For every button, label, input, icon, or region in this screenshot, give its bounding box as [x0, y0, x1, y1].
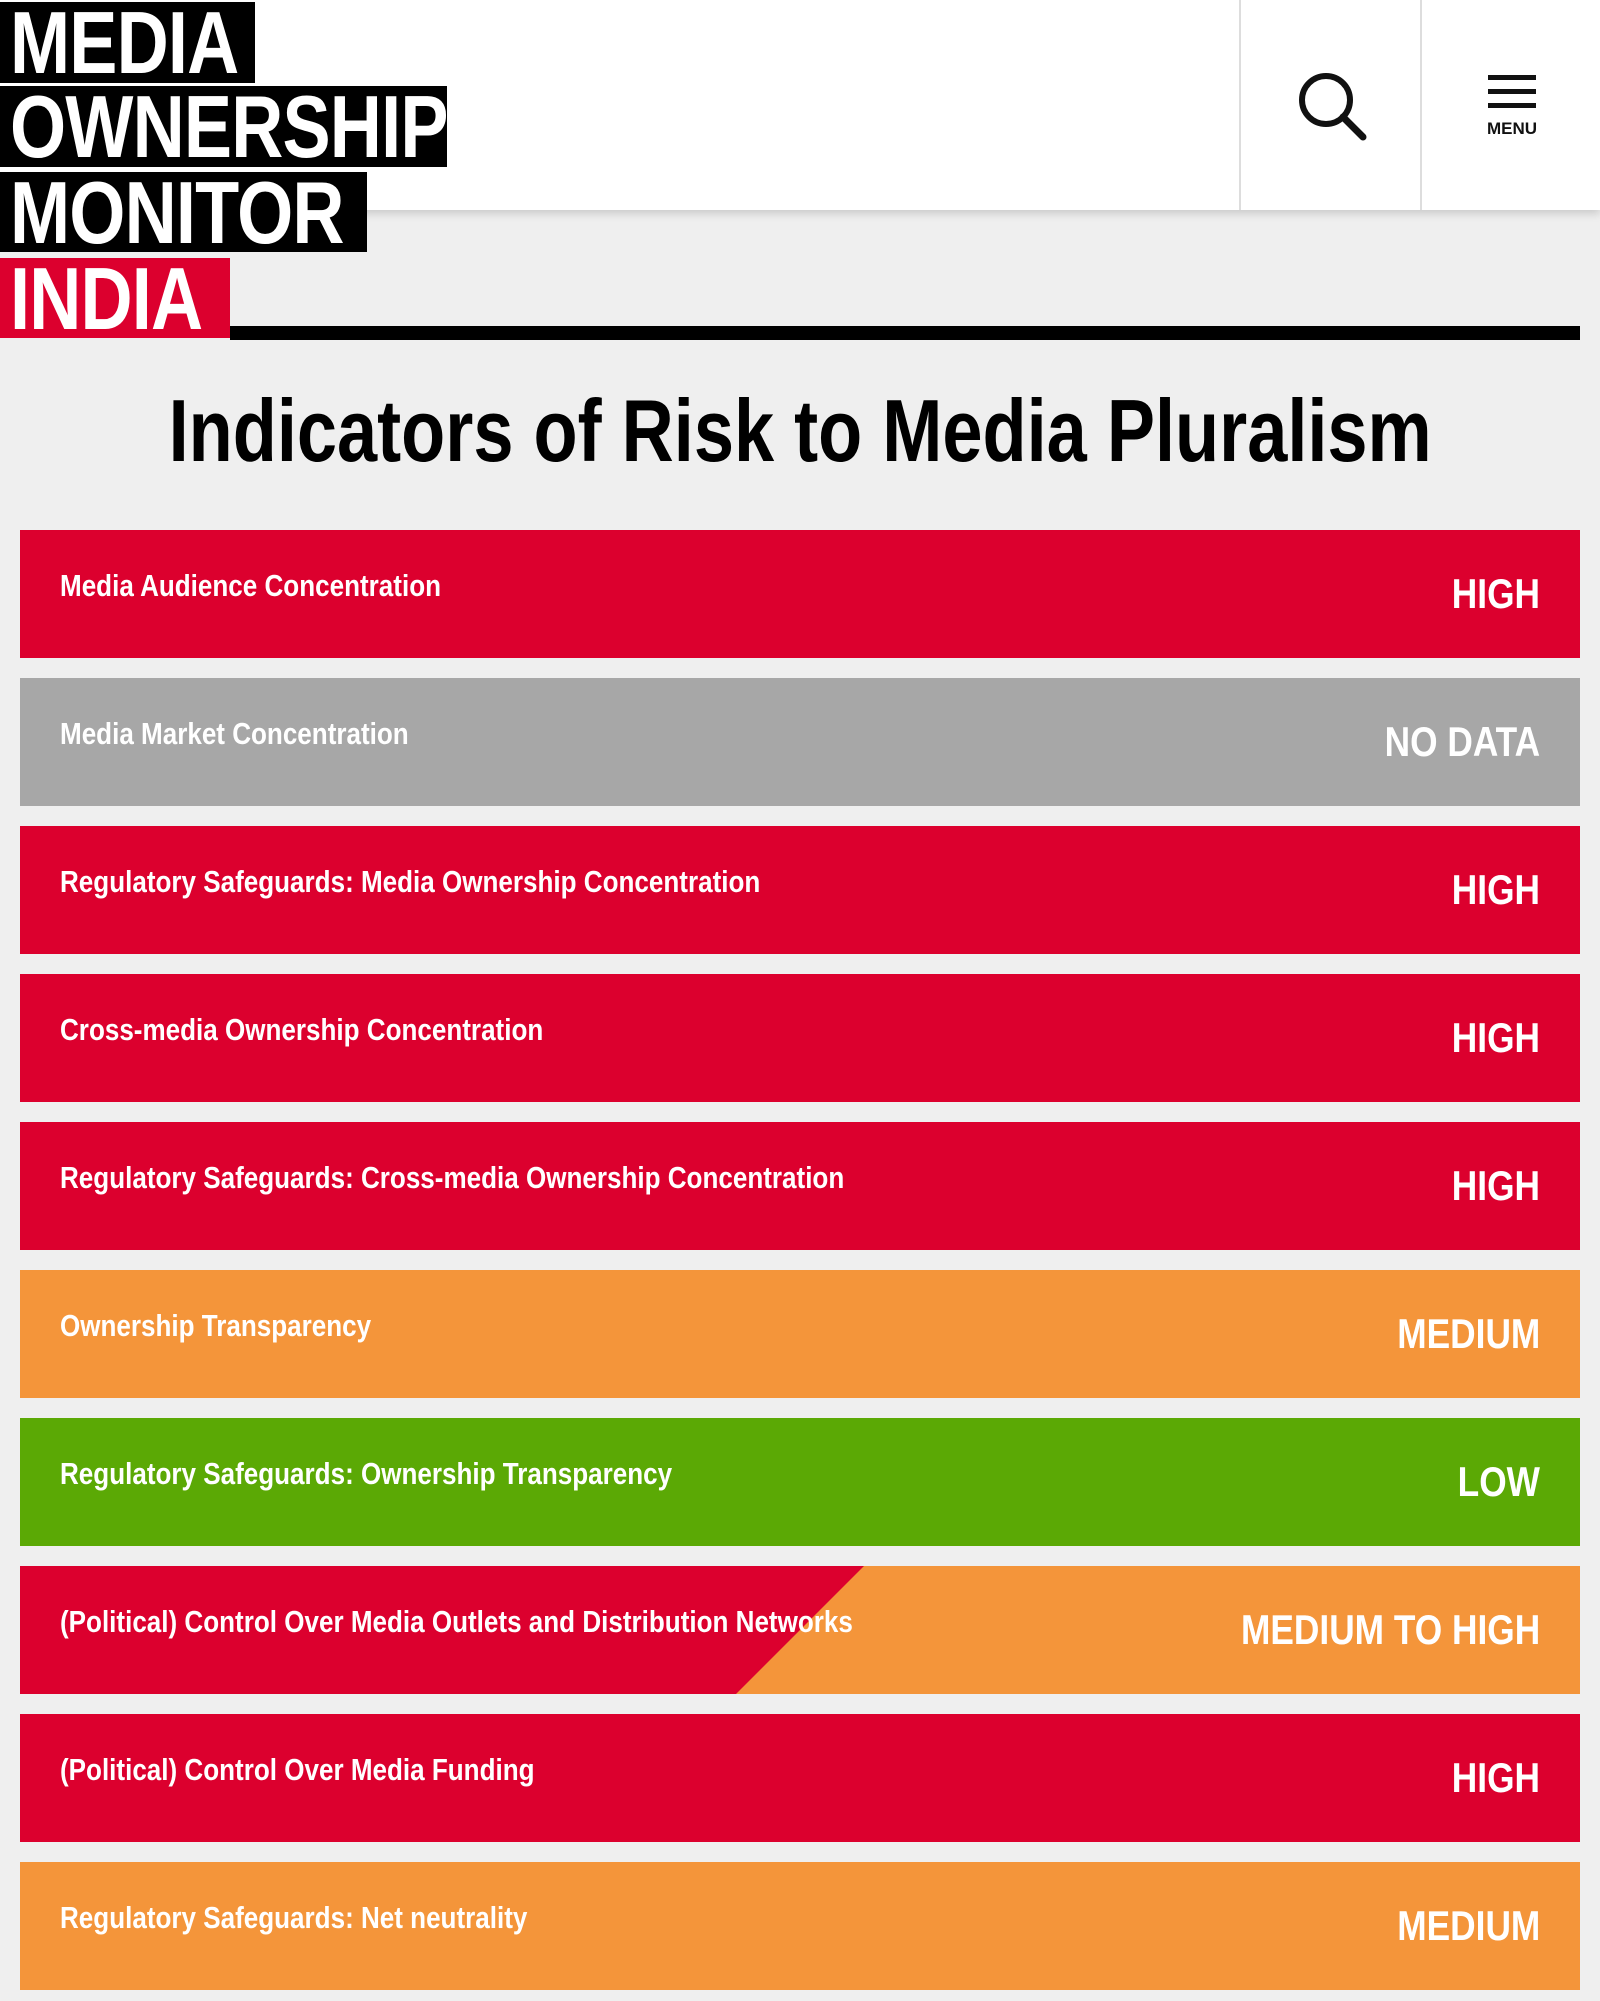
row 2: NO DATA — [1385, 718, 1540, 765]
row 6: MEDIUM — [1397, 1310, 1540, 1357]
header bar — [0, 0, 1600, 210]
row 1: Media Audience Concentration — [60, 568, 441, 603]
row 8: MEDIUM TO HIGH — [1241, 1606, 1540, 1653]
row 10: Regulatory Safeguards: Net neutrality — [60, 1900, 527, 1935]
row 3: Regulatory Safeguards: Media Ownership Concentration — [60, 864, 760, 899]
title: Indicators of Risk to Media Pluralism — [168, 381, 1432, 480]
icon: search — [1239, 0, 1420, 210]
row 10: MEDIUM — [1397, 1902, 1540, 1949]
row 9: (Political) Control Over Media Funding — [60, 1752, 535, 1787]
row 5: Regulatory Safeguards: Cross-media Ownership Concentration — [60, 1160, 844, 1195]
row 9: HIGH — [1452, 1754, 1540, 1801]
row 9 — [20, 1714, 1580, 1842]
row 7: LOW — [1458, 1458, 1540, 1505]
icon: menu: MENU — [1487, 119, 1537, 138]
row 3 — [20, 826, 1580, 954]
row 10 — [20, 1862, 1580, 1990]
row 2 — [20, 678, 1580, 806]
row 1: HIGH — [1452, 570, 1540, 617]
row 3: HIGH — [1452, 866, 1540, 913]
row 4: Cross-media Ownership Concentration — [60, 1012, 543, 1047]
icon: menu — [1420, 0, 1600, 210]
row 8 — [20, 1566, 1580, 1694]
row 1 — [20, 530, 1580, 658]
row 5 — [20, 1122, 1580, 1250]
row 8: (Political) Control Over Media Outlets and Distribution Networks — [60, 1604, 853, 1639]
logo — [0, 2, 447, 338]
row 2: Media Market Concentration — [60, 716, 409, 751]
row 6 — [20, 1270, 1580, 1398]
row 4: HIGH — [1452, 1014, 1540, 1061]
row 4 — [20, 974, 1580, 1102]
row 7 — [20, 1418, 1580, 1546]
row 5: HIGH — [1452, 1162, 1540, 1209]
row 7: Regulatory Safeguards: Ownership Transparency — [60, 1456, 672, 1491]
row 6: Ownership Transparency — [60, 1308, 371, 1343]
